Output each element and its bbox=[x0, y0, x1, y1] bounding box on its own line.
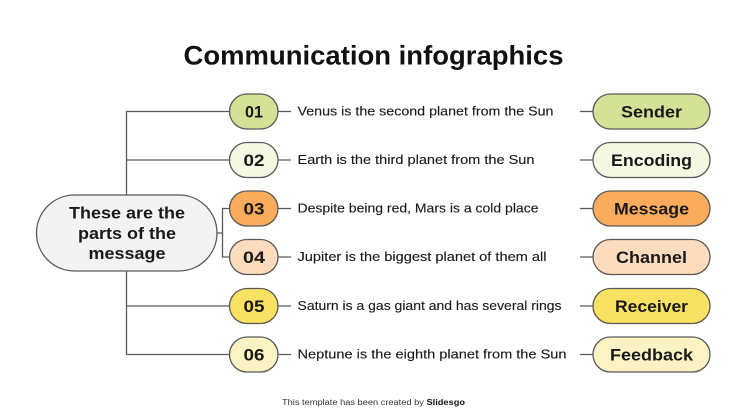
row 03: Message: 03 bbox=[244, 200, 264, 218]
row 02: Encoding: 02 bbox=[244, 151, 264, 170]
row 06: Feedback: Feedback bbox=[610, 346, 694, 364]
row 04: Channel: 04 bbox=[243, 248, 266, 267]
row 02: Encoding bbox=[230, 142, 710, 178]
row 01: Sender: 01 bbox=[245, 102, 263, 122]
row 05: Receiver: 05 bbox=[244, 297, 264, 316]
footer credit: This template has been created by Slidesgo bbox=[282, 398, 465, 407]
row 01: Sender: Sender bbox=[621, 104, 683, 122]
row 01: Sender bbox=[230, 94, 710, 129]
row 03: Message: Despite being red, Mars is a cold place bbox=[298, 200, 538, 216]
row 01: Sender: Venus is the second planet from the Sun bbox=[298, 104, 554, 118]
row 04: Channel: Channel bbox=[616, 249, 687, 267]
row 03: Message bbox=[230, 191, 710, 226]
row 05: Receiver: Receiver bbox=[615, 298, 689, 316]
central node: parts of the message: parts of the bbox=[78, 225, 176, 243]
row 06: Feedback: Neptune is the eighth planet from the Sun bbox=[298, 346, 566, 362]
row 03: Message: Message bbox=[614, 200, 689, 218]
row 04: Channel bbox=[230, 240, 710, 274]
row 05: Receiver: Saturn is a gas giant and has several rings bbox=[298, 298, 562, 313]
row 02: Encoding: Encoding bbox=[611, 152, 692, 170]
row 05: Receiver bbox=[230, 288, 710, 324]
central node: parts of the message: message bbox=[88, 245, 166, 263]
row 06: Feedback: 06 bbox=[244, 346, 264, 364]
central node: parts of the message bbox=[36, 195, 217, 271]
connector tree bbox=[126, 112, 593, 354]
title: Communication infographics bbox=[184, 40, 564, 70]
row 04: Channel: Jupiter is the biggest planet of them all bbox=[298, 249, 547, 264]
central node: parts of the message: These are the bbox=[69, 204, 185, 222]
row 02: Encoding: Earth is the third planet from the Sun bbox=[298, 152, 534, 167]
row 06: Feedback bbox=[230, 337, 710, 372]
